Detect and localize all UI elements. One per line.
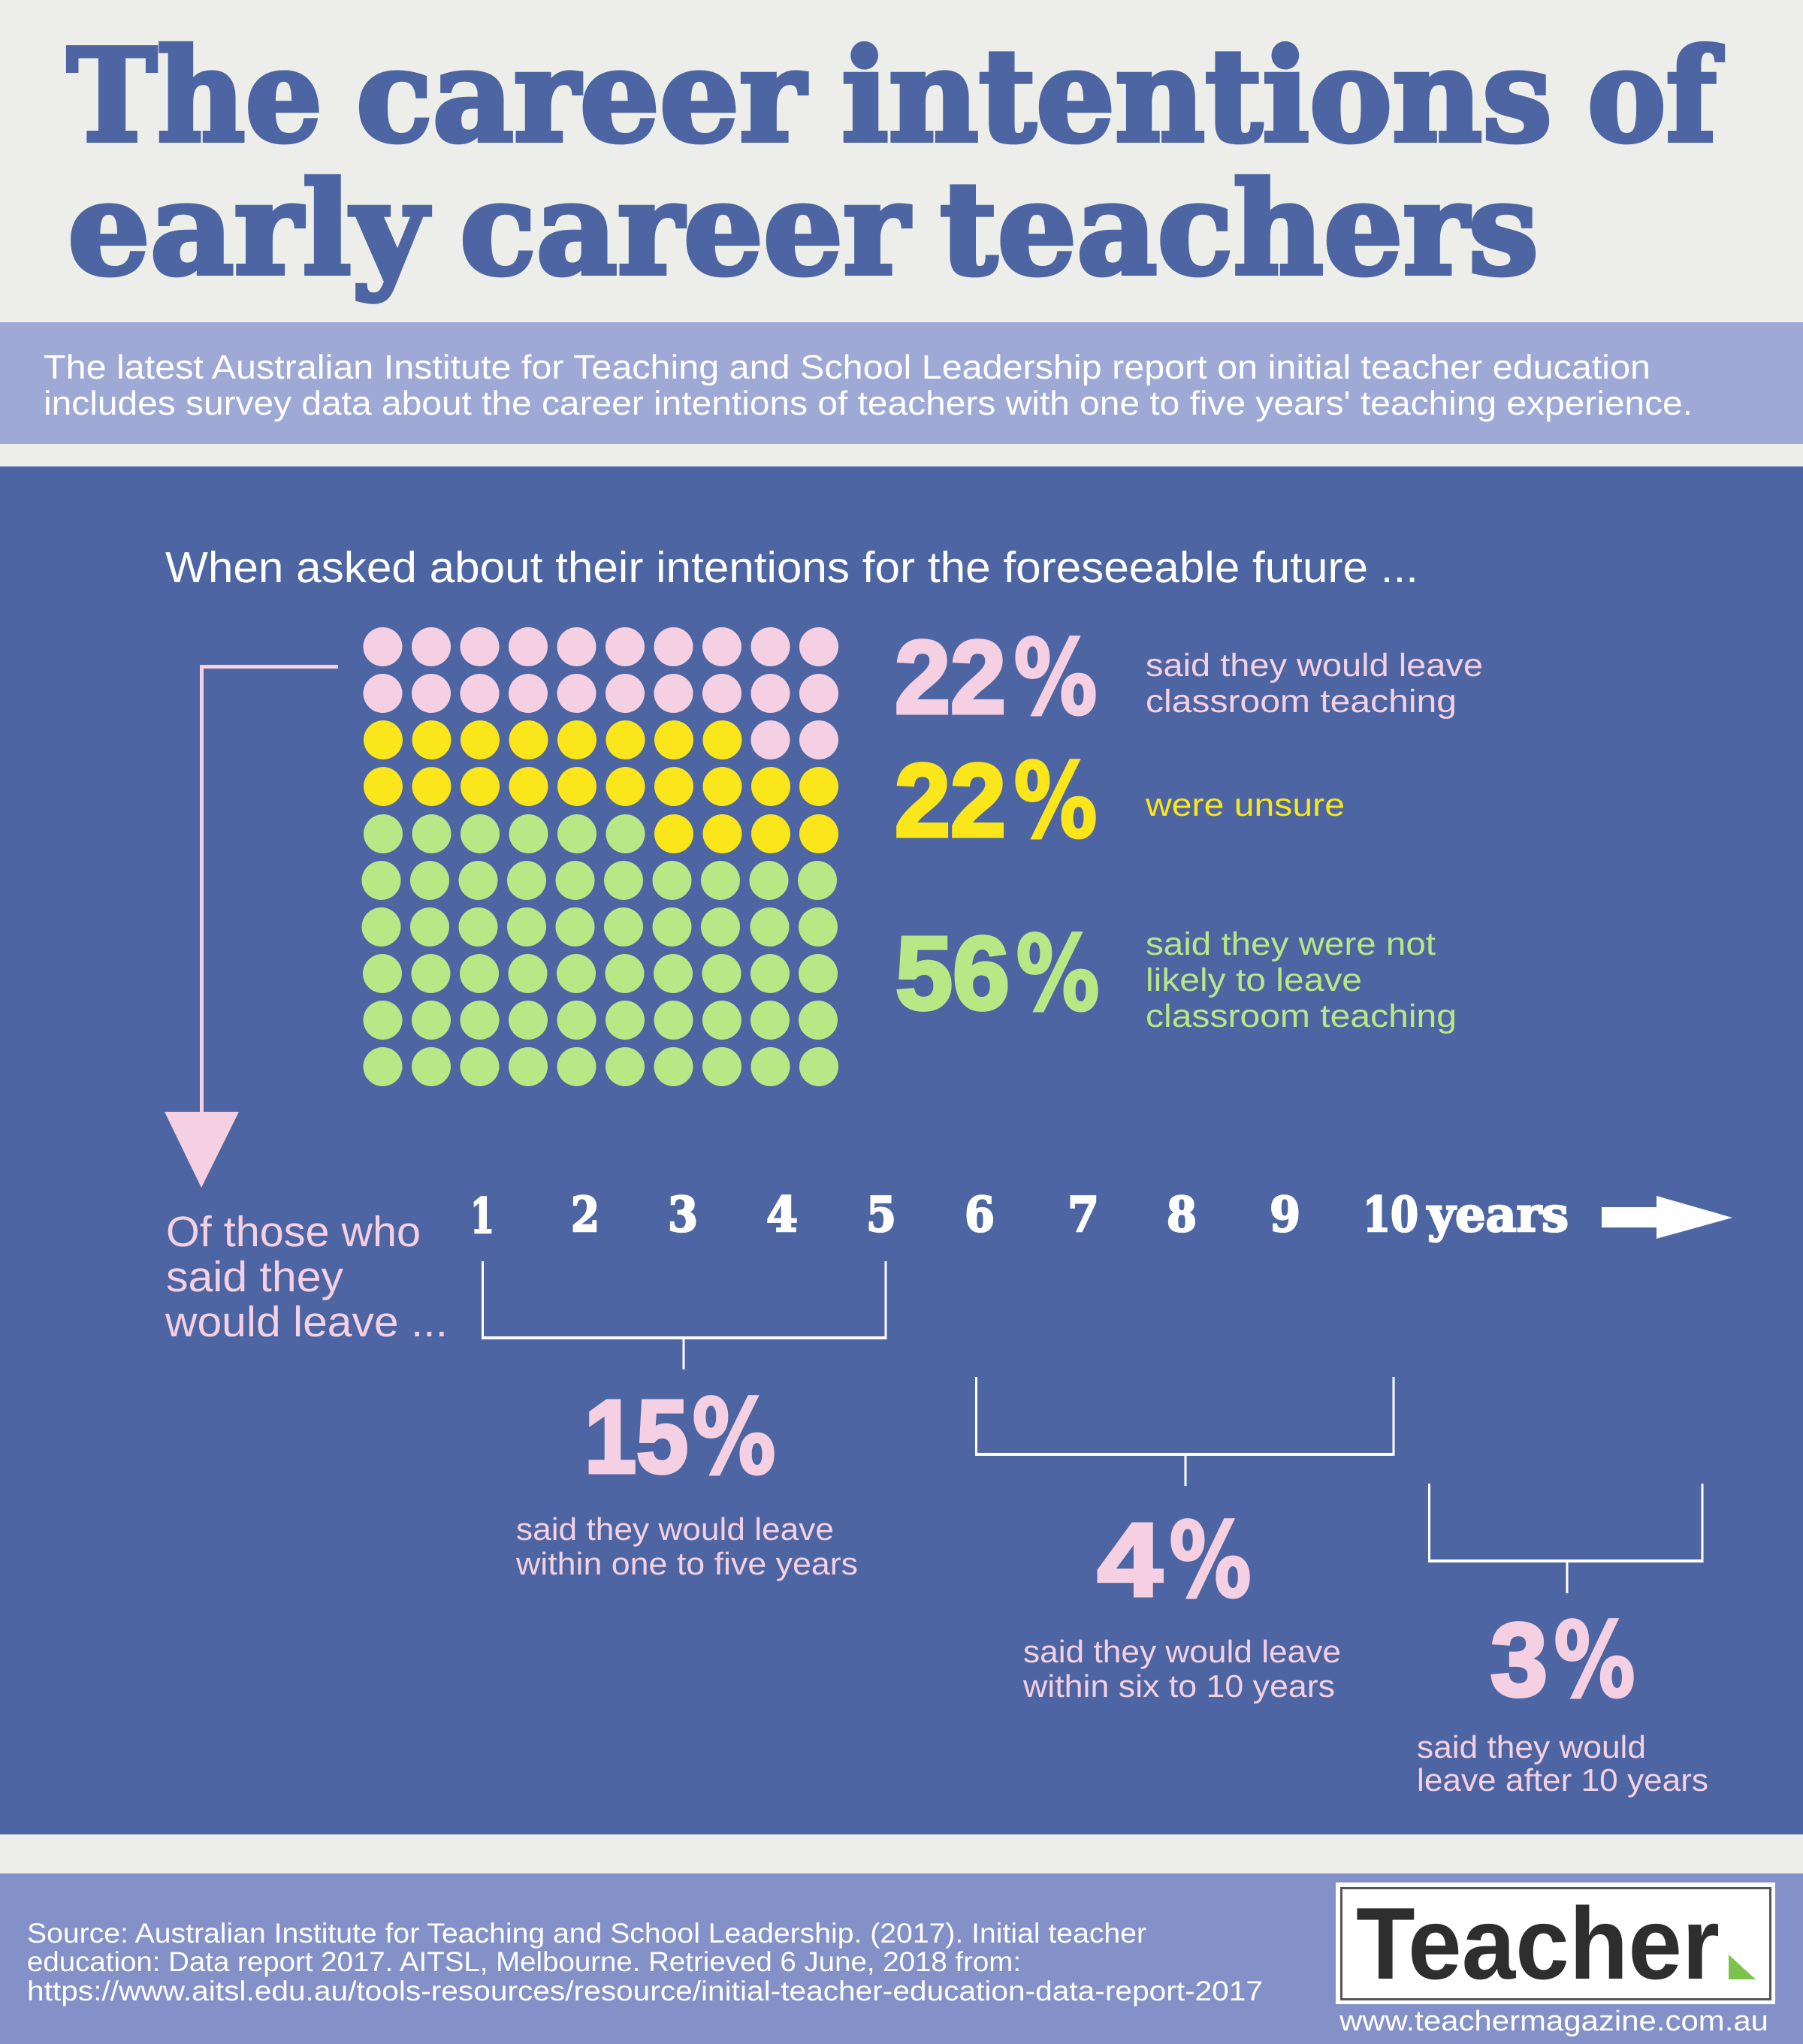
- label: classroom teaching: [1146, 998, 1457, 1034]
- title: [67, 21, 1723, 304]
- label: said they were not: [1146, 926, 1436, 962]
- bracket: one to five years: [482, 1261, 886, 1369]
- panel: footer: [0, 1873, 1803, 2044]
- bracket: six to ten years: [975, 1377, 1394, 1486]
- label: [1022, 1634, 1341, 1704]
- title: The: [67, 21, 322, 171]
- label: [1146, 648, 1483, 720]
- title: career: [460, 154, 911, 304]
- number: [1490, 1600, 1635, 1721]
- timeline: years 1 to 10: 7: [1068, 1187, 1099, 1243]
- label: within one to five years: [515, 1546, 858, 1581]
- arrow: from pink dots to follow-up: [165, 665, 338, 1188]
- number: %: [1554, 1600, 1635, 1721]
- title: intentions: [841, 21, 1552, 171]
- text: of those who said they would leave: Of those who: [166, 1208, 421, 1256]
- timeline: years 1 to 10: 3: [668, 1187, 698, 1243]
- number: %: [1013, 617, 1098, 738]
- number: %: [1013, 741, 1098, 862]
- timeline: years 1 to 10: 6: [965, 1187, 995, 1243]
- dot chart: 100 dots: [362, 627, 838, 1086]
- label: [1417, 1729, 1708, 1798]
- label: likely to leave: [1146, 962, 1362, 998]
- number: 4: [1098, 1502, 1162, 1618]
- timeline: years 1 to 10: 9: [1270, 1187, 1300, 1243]
- label: said they would leave: [1023, 1634, 1341, 1669]
- number: %: [692, 1377, 776, 1498]
- label: within six to 10 years: [1022, 1668, 1335, 1704]
- timeline: years 1 to 10: 10: [1363, 1187, 1418, 1243]
- number: [584, 1377, 776, 1498]
- panel: main survey results: [0, 466, 1803, 1834]
- timeline: years 1 to 10: [470, 1187, 1569, 1245]
- panel: introduction: [0, 322, 1803, 444]
- label: [1146, 926, 1457, 1034]
- dots: not likely to leave: [362, 814, 838, 1086]
- panel: introduction: includes survey data about the career intentions of teachers with one to five years' teaching experience.: [44, 384, 1693, 422]
- bracket: after ten years: [1428, 1484, 1704, 1593]
- text: of those who said they would leave: [165, 1208, 448, 1346]
- title: of: [1587, 21, 1723, 171]
- panel: introduction: The latest Australian Institute for Teaching and School Leadership report on initial teacher education: [44, 348, 1650, 386]
- number: [895, 913, 1100, 1034]
- stat: 15% within one to five years: [515, 1377, 858, 1581]
- number: 22: [895, 620, 1006, 735]
- dots: would leave: [364, 627, 838, 759]
- timeline: years 1 to 10: 5: [866, 1187, 896, 1243]
- timeline: years 1 to 10: 8: [1167, 1187, 1197, 1243]
- dots: unsure: [364, 720, 838, 853]
- stat: 56% not likely: [895, 913, 1457, 1034]
- number: 22: [895, 743, 1006, 859]
- source text: Source: Australian Institute for Teaching and School Leadership. (2017). Initial teacher: [27, 1918, 1146, 1949]
- number: %: [1169, 1500, 1252, 1621]
- timeline: years 1 to 10: 4: [766, 1187, 798, 1243]
- number: 3: [1490, 1602, 1548, 1718]
- label: said they would: [1417, 1729, 1646, 1765]
- title: early: [68, 154, 430, 304]
- number: [1098, 1500, 1252, 1621]
- number: 56: [895, 916, 1010, 1031]
- stat: 4% within six to ten years: [1022, 1500, 1341, 1704]
- label: were unsure: [1145, 787, 1345, 823]
- stat: 22% leave: [895, 617, 1483, 738]
- label: said they would leave: [1146, 648, 1483, 684]
- text: of those who said they would leave: said they: [166, 1253, 344, 1301]
- logo: Teacher: Teacher: [1356, 1886, 1720, 2000]
- title: career: [356, 21, 807, 171]
- number: 15: [584, 1379, 688, 1495]
- source text: https://www.aitsl.edu.au/tools-resources/resource/initial-teacher-education-data-report-2017: [27, 1976, 1263, 2006]
- label: [515, 1511, 858, 1581]
- number: %: [1016, 913, 1100, 1034]
- arrow: timeline direction: [1602, 1196, 1732, 1239]
- label: said they would leave: [516, 1511, 834, 1547]
- source text: education: Data report 2017. AITSL, Melbourne. Retrieved 6 June, 2018 from:: [27, 1946, 1021, 1977]
- timeline: years 1 to 10: 1: [470, 1188, 494, 1245]
- number: [895, 741, 1098, 862]
- label: leave after 10 years: [1417, 1762, 1708, 1798]
- timeline: years 1 to 10: years: [1427, 1187, 1569, 1243]
- number: [895, 617, 1098, 738]
- source text: [27, 1918, 1263, 2006]
- timeline: years 1 to 10: 2: [571, 1187, 599, 1243]
- website url: www.teachermagazine.com.au: [1339, 2006, 1768, 2037]
- label: classroom teaching: [1146, 684, 1457, 720]
- heading: survey question: When asked about their intentions for the foreseeable future ...: [165, 543, 1418, 592]
- title: teachers: [940, 154, 1539, 304]
- stat: 22% unsure: [895, 741, 1345, 862]
- stat: 3% after ten years: [1417, 1600, 1708, 1798]
- text: of those who said they would leave: would leave ...: [165, 1298, 448, 1346]
